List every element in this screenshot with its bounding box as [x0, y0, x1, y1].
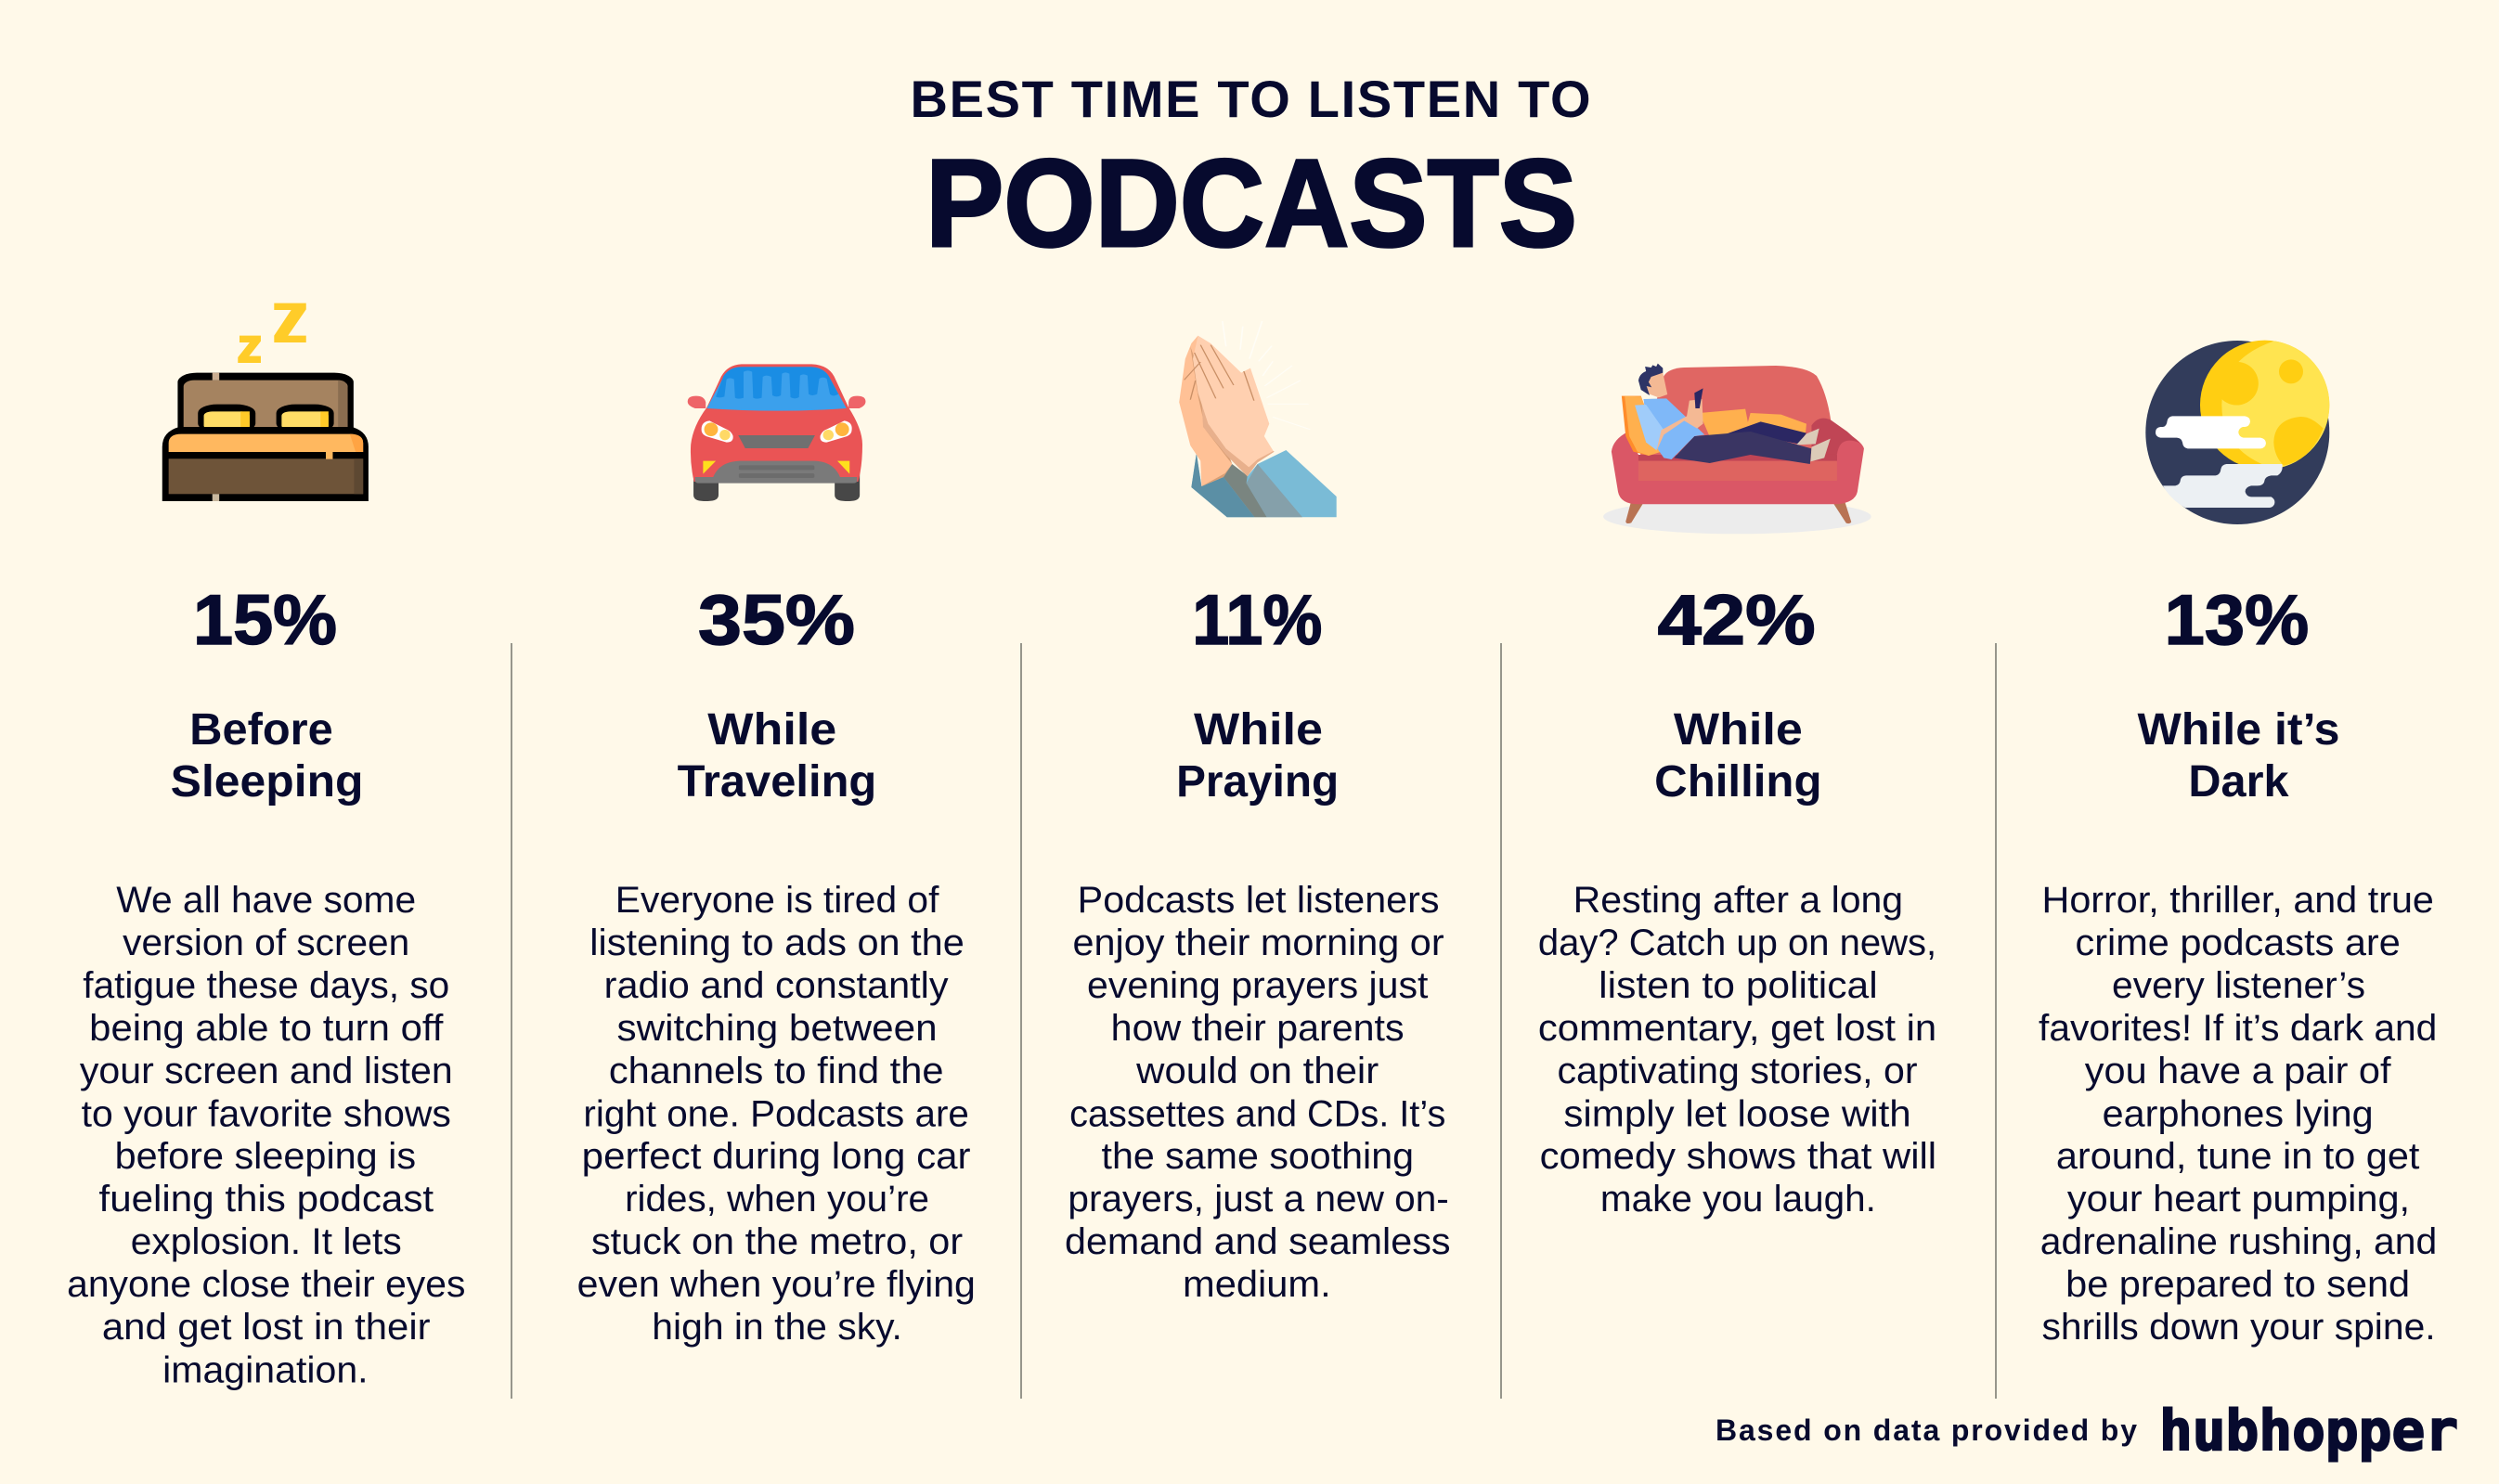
- text block: while traveling description: switching between: [616, 1008, 938, 1049]
- text block: while traveling description: channels to find the: [609, 1051, 943, 1091]
- text block: before sleeping description: fatigue these days, so: [83, 965, 449, 1006]
- text block: while chilling description: Resting after a long: [1573, 880, 1903, 921]
- heading: podcasts: PODCASTS: [926, 135, 1577, 273]
- text block: while traveling description: [577, 880, 976, 1348]
- text block: while it's dark description: you have a pair of: [2085, 1051, 2391, 1091]
- text block: before sleeping description: and get lost in their: [102, 1307, 431, 1348]
- dividers: [511, 643, 1996, 1399]
- text block: before sleeping description: imagination.: [162, 1349, 369, 1390]
- text block: while praying description: demand and seamless: [1065, 1221, 1450, 1262]
- text block: while chilling description: [1538, 880, 1936, 1219]
- text block: while traveling description: radio and constantly: [604, 965, 949, 1006]
- panel: while traveling: [577, 581, 976, 1348]
- text block: before sleeping description: before sleeping is: [115, 1136, 416, 1177]
- text block: while chilling description: commentary, get lost in: [1538, 1008, 1936, 1049]
- text block: while chilling description: simply let loose with: [1563, 1093, 1911, 1134]
- text block: while praying description: [1065, 880, 1450, 1305]
- heading: while praying: [1176, 705, 1339, 807]
- heading: while traveling: While: [707, 705, 836, 755]
- heading: while traveling: [678, 705, 876, 807]
- text block: while traveling description: Everyone is tired of: [615, 880, 939, 921]
- text block: while praying description: evening prayers just: [1087, 965, 1428, 1006]
- heading: while it's dark: [2137, 705, 2339, 807]
- logo: hubhopper: hubhopper: [2159, 1399, 2458, 1464]
- panel: while praying: [1065, 581, 1450, 1305]
- heading: while chilling: While: [1674, 705, 1803, 755]
- text block: while it's dark description: every listener’s: [2112, 965, 2365, 1006]
- text block: while it's dark description: crime podcasts are: [2076, 923, 2401, 963]
- text block: while chilling description: comedy shows that will: [1540, 1136, 1936, 1177]
- heading: while praying: Praying: [1176, 757, 1339, 807]
- text block: while traveling description: listening to ads on the: [589, 923, 965, 963]
- text block: while it's dark description: around, tune in to get: [2056, 1136, 2419, 1177]
- text block: while praying description: prayers, just a new on-: [1068, 1179, 1449, 1219]
- text block: while it's dark description: shrills down your spine.: [2042, 1307, 2436, 1348]
- heading: while it's dark: Dark: [2188, 757, 2289, 807]
- icon: bed with sleeping z letters: [162, 303, 369, 501]
- text block: while praying description: medium.: [1183, 1264, 1331, 1305]
- heading: while it's dark: While it’s: [2137, 705, 2339, 755]
- icon: praying hands: [1179, 321, 1337, 517]
- text block: before sleeping description: fueling this podcast: [98, 1179, 434, 1219]
- icon: red car front view: [688, 364, 865, 501]
- text block: while it's dark description: be prepared to send: [2065, 1264, 2410, 1305]
- text block: while traveling description: even when you’re flying: [577, 1264, 976, 1305]
- text block: before sleeping description: anyone close their eyes: [67, 1264, 465, 1305]
- heading: while praying: While: [1194, 705, 1323, 755]
- heading: while chilling: [1654, 705, 1821, 807]
- heading: before sleeping: Sleeping: [171, 757, 364, 807]
- text block: while it's dark description: favorites! If it’s dark and: [2039, 1008, 2437, 1049]
- heading: while traveling: Traveling: [678, 757, 876, 807]
- text block: before sleeping description: [67, 880, 465, 1390]
- text block: while it's dark description: Horror, thriller, and true: [2042, 880, 2434, 921]
- text block: before sleeping description: to your favorite shows: [82, 1093, 451, 1134]
- heading: while chilling: Chilling: [1654, 757, 1821, 807]
- text block: before sleeping description: your screen and listen: [80, 1051, 453, 1091]
- text block: while praying description: Podcasts let listeners: [1078, 880, 1439, 921]
- text block: before sleeping description: being able to turn off: [89, 1008, 444, 1049]
- text block: while traveling description: stuck on the metro, or: [591, 1221, 963, 1262]
- heading: before sleeping: [171, 705, 364, 807]
- percentage: 15%: 15%: [193, 581, 337, 660]
- text block: while traveling description: high in the sky.: [652, 1307, 902, 1348]
- text block: while it's dark description: [2039, 880, 2437, 1348]
- text block: while traveling description: right one. Podcasts are: [583, 1093, 969, 1134]
- text block: while it's dark description: earphones lying: [2103, 1093, 2374, 1134]
- icon: full moon with clouds: [2145, 341, 2329, 524]
- text block: while chilling description: listen to political: [1599, 965, 1878, 1006]
- panel: before sleeping: [67, 581, 465, 1390]
- text block: while praying description: the same soothing: [1101, 1136, 1414, 1177]
- panel: while it's dark: [2039, 581, 2437, 1348]
- text block: while chilling description: captivating stories, or: [1558, 1051, 1918, 1091]
- text block: while praying description: how their parents: [1111, 1008, 1405, 1049]
- percentage: 35%: 35%: [698, 581, 855, 660]
- percentage: 13%: 13%: [2165, 581, 2309, 660]
- heading: best time to listen to: BEST TIME TO LISTEN TO: [910, 70, 1591, 128]
- title: [910, 70, 1591, 273]
- text block: before sleeping description: explosion. It lets: [131, 1221, 402, 1262]
- percentage: 42%: 42%: [1658, 581, 1816, 660]
- text block: while praying description: enjoy their morning or: [1073, 923, 1444, 963]
- panel: while chilling: [1538, 581, 1936, 1219]
- footer: data source credit: [1716, 1399, 2458, 1464]
- text block: while praying description: would on their: [1135, 1051, 1379, 1091]
- text block: while traveling description: perfect during long car: [582, 1136, 971, 1177]
- text block: while chilling description: day? Catch up on news,: [1538, 923, 1936, 963]
- text block: while traveling description: rides, when you’re: [625, 1179, 929, 1219]
- heading: before sleeping: Before: [189, 705, 333, 755]
- text block: while it's dark description: adrenaline rushing, and: [2040, 1221, 2437, 1262]
- text block: while praying description: cassettes and CDs. It’s: [1069, 1093, 1445, 1134]
- percentage: 11%: 11%: [1192, 581, 1322, 660]
- icon: man relaxing on red sofa: [1603, 364, 1871, 534]
- text block: while it's dark description: your heart pumping,: [2067, 1179, 2410, 1219]
- text block: before sleeping description: We all have some: [116, 880, 416, 921]
- text block: before sleeping description: version of screen: [123, 923, 409, 963]
- text: based on data provided by: Based on data provided by: [1716, 1413, 2137, 1447]
- text block: while chilling description: make you laugh.: [1600, 1179, 1876, 1219]
